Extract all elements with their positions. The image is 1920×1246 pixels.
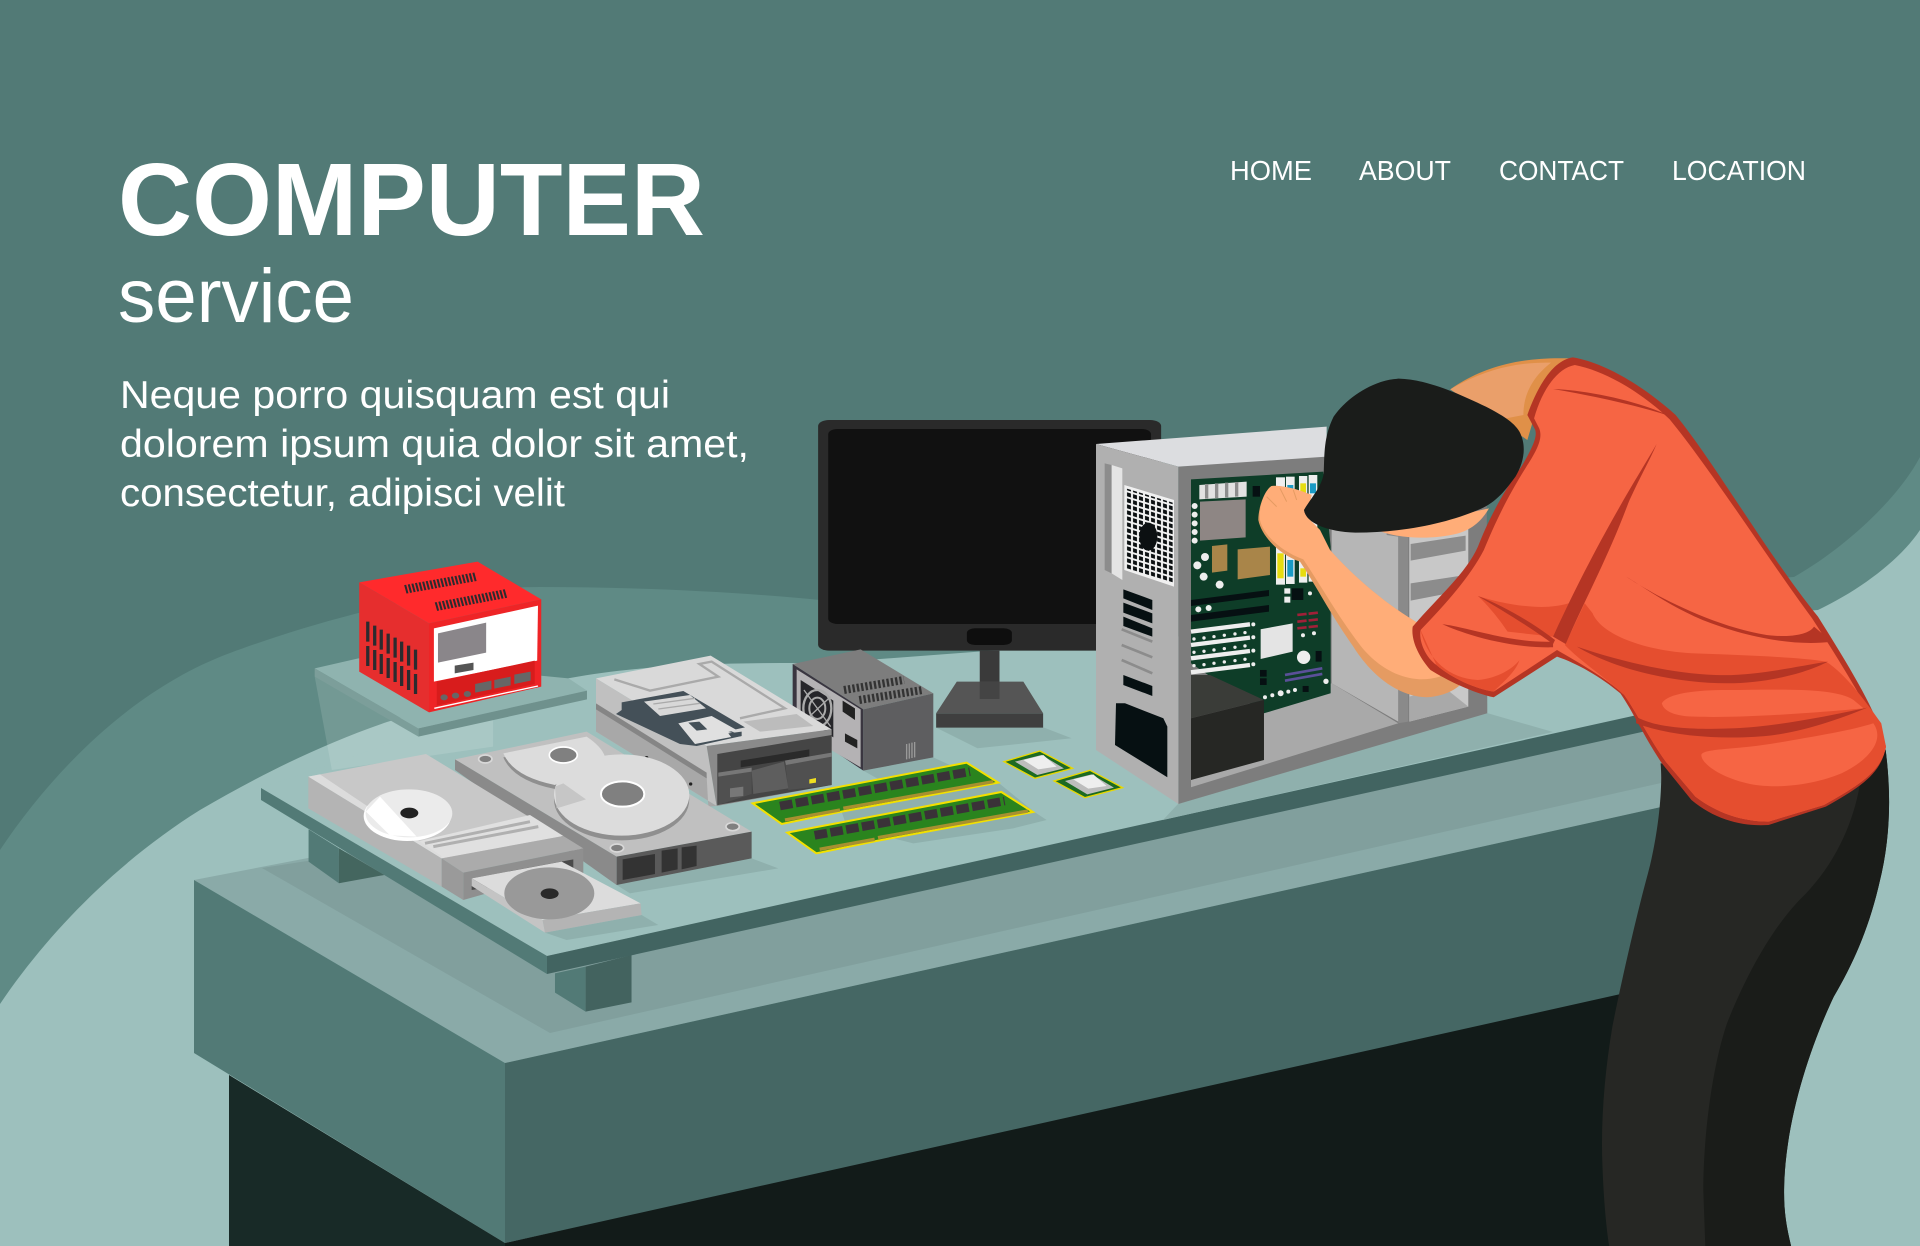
drive slots bbox=[1123, 589, 1152, 610]
title: COMPUTER bbox=[118, 142, 705, 257]
psu shadow bbox=[863, 757, 953, 780]
ram stick 2 bbox=[787, 792, 1033, 853]
chin skin bbox=[1381, 508, 1489, 538]
shirt creases bbox=[1553, 444, 1657, 644]
tower front panel bbox=[1096, 444, 1178, 804]
ram shadow bbox=[842, 783, 1047, 843]
monitor shadow bbox=[936, 728, 1072, 748]
desk top surface bbox=[194, 640, 1661, 1063]
under desk left bbox=[229, 1075, 505, 1246]
optical drive shadow bbox=[545, 915, 658, 940]
arm and hand bbox=[1258, 486, 1460, 697]
tower vent bbox=[1124, 485, 1174, 587]
cpu chip 2 bbox=[1054, 770, 1123, 798]
ram stick 1 bbox=[753, 763, 998, 824]
memory modules bbox=[753, 763, 1047, 853]
cpu chip 1 bbox=[1004, 751, 1073, 778]
hair bbox=[1304, 379, 1524, 533]
floppy drive bbox=[596, 656, 832, 807]
shirt bbox=[1412, 357, 1886, 825]
desk top shadow bbox=[262, 650, 1661, 1033]
glass front edge bbox=[547, 710, 1660, 974]
shadow wedge behind monitor bbox=[860, 640, 985, 666]
trousers bbox=[1602, 747, 1889, 1246]
back table leg bbox=[309, 829, 384, 883]
description text: Neque porro quisquam est qui bbox=[120, 374, 670, 417]
floppy disk bbox=[616, 691, 745, 746]
description text bbox=[120, 374, 749, 515]
neck skin bbox=[1450, 358, 1569, 440]
navigation menu bbox=[1230, 155, 1806, 186]
monitor bbox=[818, 420, 1161, 748]
motherboard bbox=[1191, 472, 1331, 713]
navigation menu: CONTACT bbox=[1499, 155, 1624, 186]
subtitle: service bbox=[118, 254, 354, 339]
glass left edge bbox=[261, 788, 547, 974]
navigation menu: ABOUT bbox=[1359, 155, 1451, 186]
desk front face bbox=[505, 807, 1661, 1243]
desk bbox=[194, 640, 1661, 1246]
front table leg bbox=[555, 955, 632, 1012]
shirt shading bbox=[1565, 603, 1886, 822]
tower top bbox=[1096, 427, 1327, 467]
cpu chips bbox=[1004, 751, 1123, 798]
background: light teal wave bbox=[0, 530, 1920, 1246]
tower bay opening bbox=[1115, 703, 1167, 777]
small shelf under red box bbox=[315, 658, 587, 770]
desk left face bbox=[194, 880, 505, 1243]
description text: consectetur, adipisci velit bbox=[120, 472, 565, 515]
background: mid teal wave bbox=[0, 457, 1920, 1246]
computer tower bbox=[1096, 427, 1487, 804]
under desk right bbox=[505, 985, 1661, 1246]
optical drive bbox=[308, 754, 658, 940]
tower shadow on glass bbox=[1163, 713, 1553, 820]
hdd shadow bbox=[617, 858, 778, 893]
person bbox=[1258, 357, 1889, 1246]
tower interior rear bbox=[1178, 440, 1487, 804]
red box device bbox=[359, 562, 541, 712]
description text: dolorem ipsum quia dolor sit amet, bbox=[120, 423, 749, 466]
navigation menu: HOME bbox=[1230, 155, 1312, 186]
power supply unit bbox=[793, 649, 953, 780]
navigation menu: LOCATION bbox=[1672, 155, 1806, 186]
tower power block bbox=[1191, 675, 1264, 780]
hard disk drive bbox=[455, 732, 778, 893]
glass table top bbox=[261, 600, 1660, 974]
